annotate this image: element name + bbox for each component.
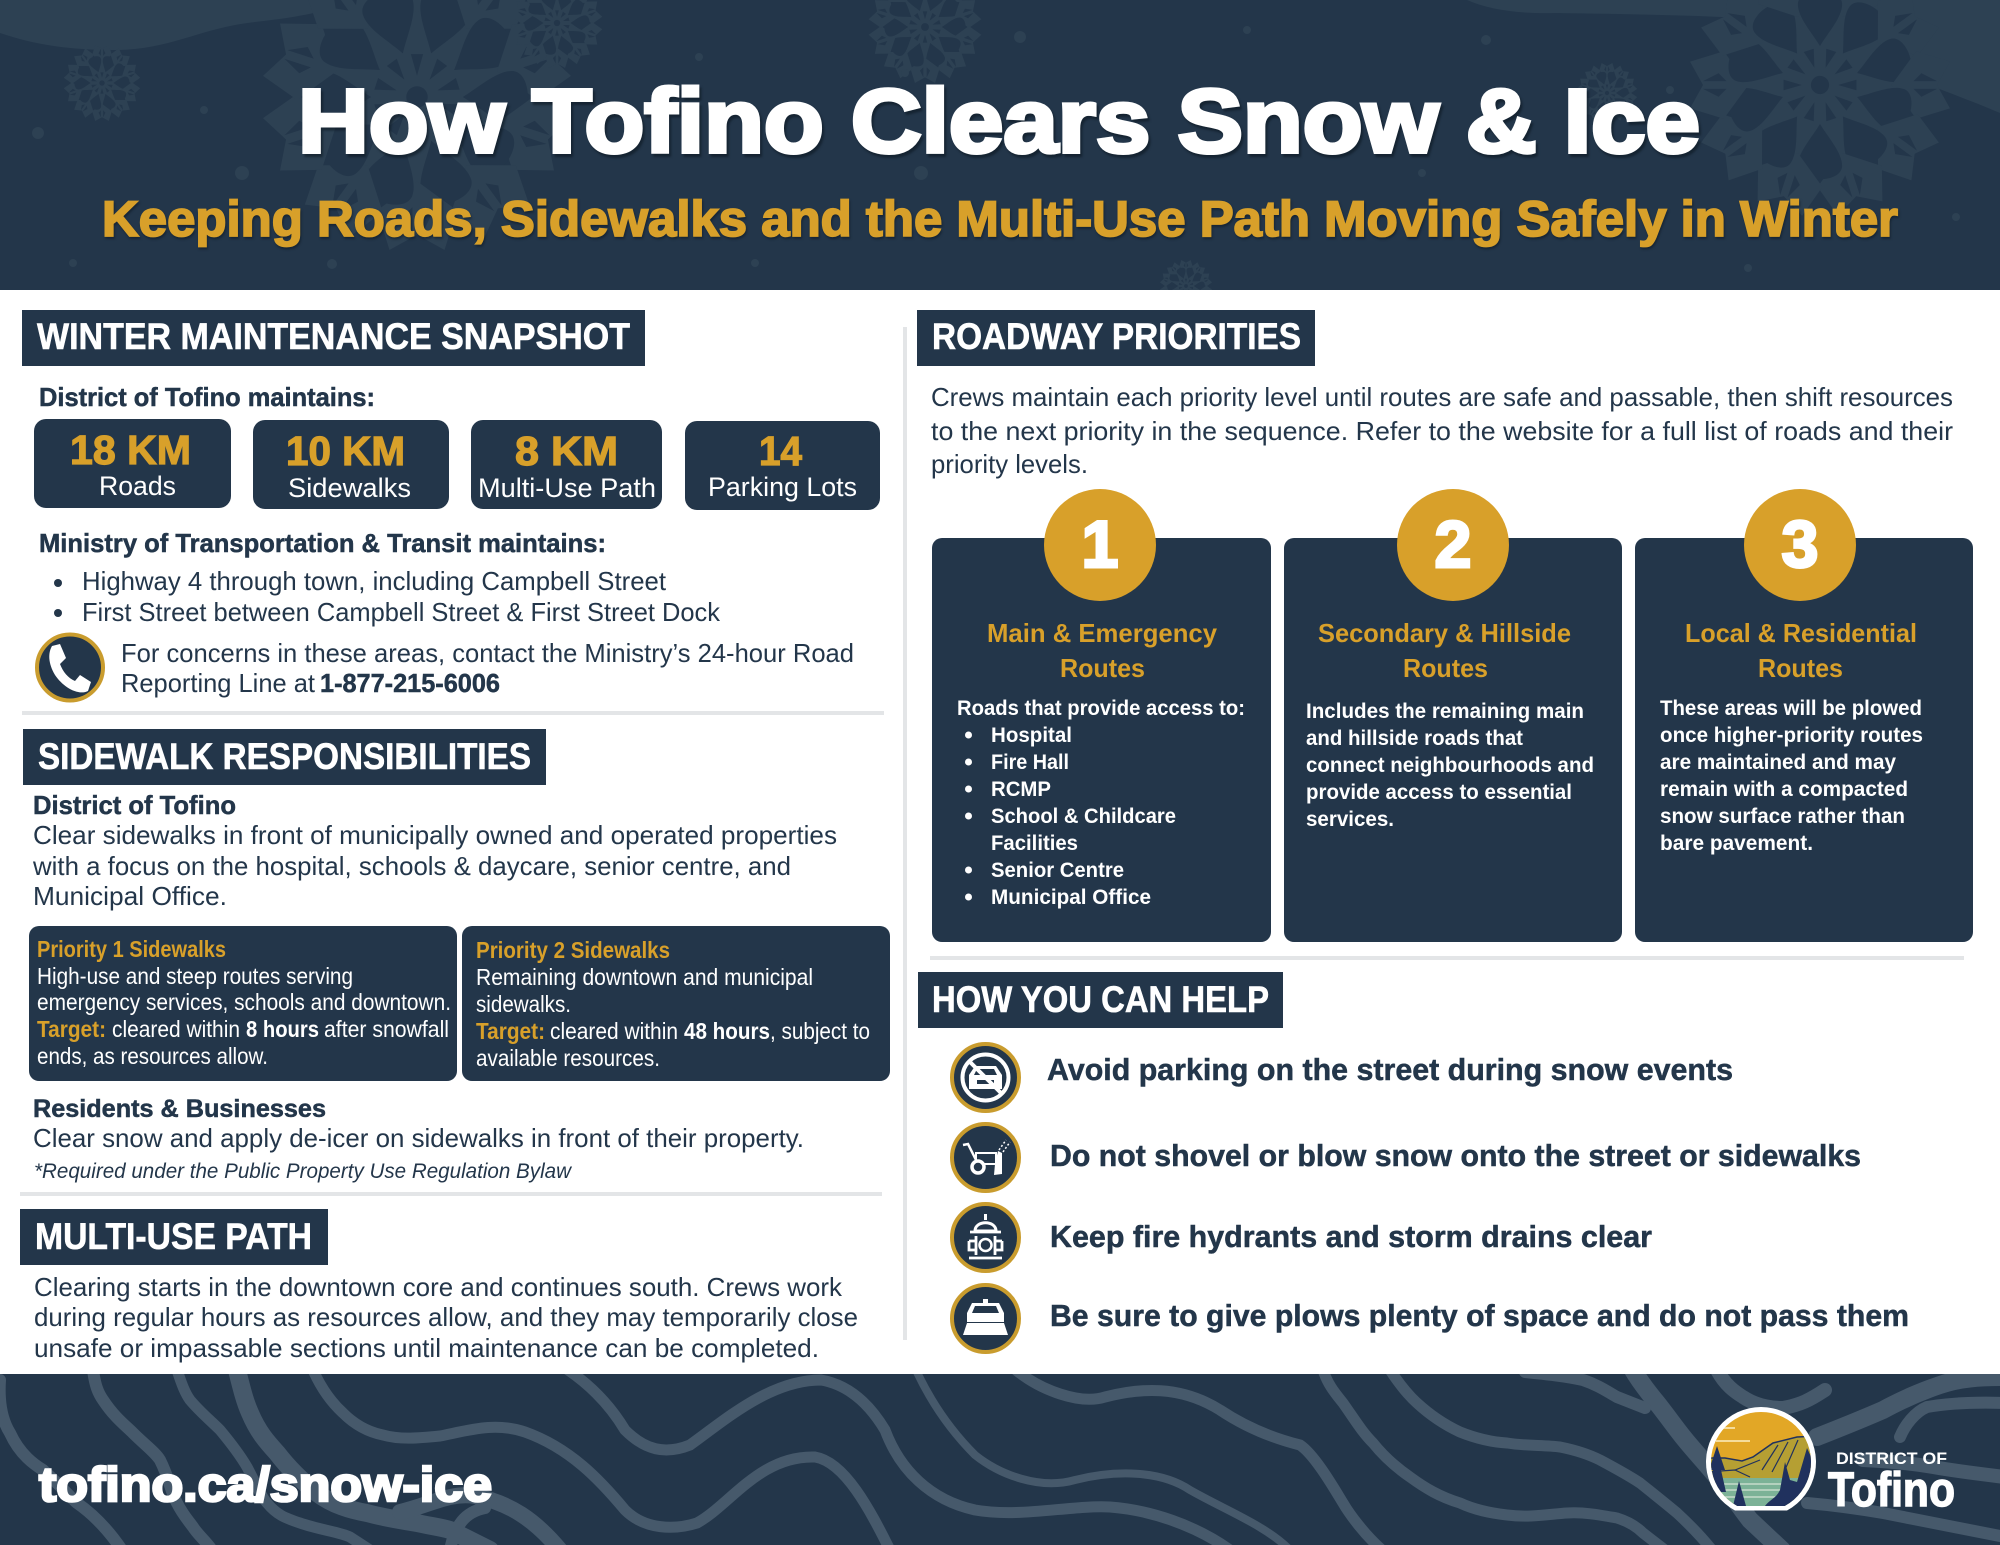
district of tofino text: District of Tofino bbox=[33, 790, 236, 820]
panel: how you can help bbox=[918, 972, 1909, 1352]
heading: winter maintenance snapshot: WINTER MAINTENANCE SNAPSHOT bbox=[37, 316, 630, 357]
stat card: sidewalks bbox=[253, 420, 449, 509]
stat card: parking lots: Parking Lots bbox=[708, 472, 857, 502]
panel: multi-use path bbox=[20, 1209, 858, 1363]
card: priority 2 sidewalks bbox=[462, 926, 890, 1081]
card: priority 2 secondary and hillside routes: Routes bbox=[1403, 653, 1488, 683]
action text: do not shovel: Do not shovel or blow snow onto the street or sidewalks bbox=[1050, 1138, 1861, 1173]
icon: snow plow bbox=[952, 1285, 1019, 1352]
card: priority 1 sidewalks bbox=[29, 926, 457, 1081]
badge: 2 bbox=[1397, 489, 1509, 601]
subtitle: Keeping Roads, Sidewalks and the Multi-Use Path Moving Safely in Winter bbox=[102, 191, 1898, 247]
icon: fire hydrant bbox=[952, 1204, 1019, 1271]
roadway intro text: Crews maintain each priority level until routes are safe and passable, then shift resources bbox=[931, 382, 1953, 412]
card: priority 1 sidewalks: Target: bbox=[37, 1016, 106, 1042]
stat card: multi-use path bbox=[471, 420, 662, 509]
panel: roadway priorities bbox=[917, 310, 1973, 942]
badge: 1 bbox=[1044, 489, 1156, 601]
logo wordmark: Tofino bbox=[1828, 1464, 1955, 1517]
card: priority 3 local and residential routes: Routes bbox=[1758, 653, 1843, 683]
multi-use path text bbox=[34, 1272, 858, 1363]
footer url: tofino.ca/snow-ice bbox=[39, 1459, 492, 1512]
card: priority 1 main and emergency routes: School & Childcare bbox=[991, 805, 1176, 828]
card: priority 1 sidewalks: 8 hours bbox=[246, 1016, 319, 1042]
stat card: parking lots: 14 bbox=[759, 428, 802, 474]
card: priority 1 sidewalks: emergency services, schools and downtown. bbox=[37, 989, 451, 1015]
heading: winter maintenance snapshot bbox=[22, 310, 645, 366]
multi-use path text: unsafe or impassable sections until maintenance can be completed. bbox=[34, 1333, 819, 1363]
stat card: sidewalks: 10 KM bbox=[286, 428, 405, 474]
logo wordmark: DISTRICT OF bbox=[1836, 1449, 1947, 1468]
card: priority 3 local and residential routes: These areas will be plowed bbox=[1660, 697, 1922, 720]
subheading: ministry maintains: Ministry of Transportation & Transit maintains: bbox=[39, 528, 606, 558]
heading: roadway priorities: ROADWAY PRIORITIES bbox=[932, 316, 1301, 357]
card: priority 3 local and residential routes: are maintained and may bbox=[1660, 751, 1896, 774]
district of tofino text: Clear sidewalks in front of municipally owned and operated properties bbox=[33, 820, 837, 850]
panel: footer bbox=[0, 1370, 2000, 1545]
card: priority 3 local and residential routes: Local & Residential bbox=[1685, 618, 1917, 648]
roadway intro text: priority levels. bbox=[931, 449, 1088, 479]
card: priority 3 local and residential routes: once higher-priority routes bbox=[1660, 724, 1923, 747]
card: priority 2 sidewalks: Priority 2 Sidewalks bbox=[476, 937, 670, 963]
stat card: roads bbox=[34, 419, 231, 508]
card: priority 2 secondary and hillside routes bbox=[1284, 489, 1622, 942]
footer wave pattern bbox=[0, 1370, 2000, 1545]
logo: district of tofino bbox=[1705, 1405, 1955, 1517]
district of tofino text: Municipal Office. bbox=[33, 881, 227, 911]
header background waves and snowflakes bbox=[0, 0, 2000, 313]
ministry contact text: For concerns in these areas, contact the Ministry’s 24-hour Road bbox=[121, 638, 854, 668]
residents and businesses text: Residents & Businesses bbox=[33, 1095, 326, 1123]
card: priority 1 main and emergency routes: Routes bbox=[1060, 653, 1145, 683]
card: priority 3 local and residential routes: remain with a compacted bbox=[1660, 778, 1908, 801]
icon: no parking bbox=[952, 1044, 1019, 1111]
card: priority 1 sidewalks: ends, as resources allow. bbox=[37, 1043, 268, 1069]
card: priority 1 sidewalks: Priority 1 Sidewalks bbox=[37, 936, 226, 962]
card: priority 2 sidewalks: 48 hours bbox=[684, 1018, 770, 1044]
panel: winter maintenance snapshot bbox=[22, 310, 880, 700]
stat card: parking lots bbox=[685, 421, 880, 510]
card: priority 1 main and emergency routes bbox=[932, 489, 1271, 942]
card: priority 2 sidewalks: available resources. bbox=[476, 1045, 660, 1071]
heading: sidewalk responsibilities bbox=[23, 729, 546, 785]
residents and businesses text bbox=[33, 1095, 804, 1183]
card: priority 2 secondary and hillside routes: Secondary & Hillside bbox=[1318, 618, 1571, 648]
stat card: multi-use path: 8 KM bbox=[515, 428, 618, 474]
residents and businesses text: *Required under the Public Property Use Regulation Bylaw bbox=[34, 1160, 573, 1183]
card: priority 3 local and residential routes: snow surface rather than bbox=[1660, 805, 1905, 828]
badge: 3 bbox=[1744, 489, 1856, 601]
heading: multi-use path bbox=[20, 1209, 328, 1265]
panel: sidewalk responsibilities bbox=[23, 729, 890, 1183]
stat card: sidewalks: Sidewalks bbox=[288, 473, 411, 503]
heading: multi-use path: MULTI-USE PATH bbox=[35, 1216, 312, 1257]
icon: phone bbox=[37, 634, 103, 700]
residents and businesses text: Clear snow and apply de-icer on sidewalks in front of their property. bbox=[33, 1123, 804, 1153]
heading: how you can help: HOW YOU CAN HELP bbox=[932, 979, 1269, 1020]
roadway intro text: to the next priority in the sequence. Refer to the website for a full list of roads and their bbox=[931, 416, 1953, 446]
stat card: multi-use path: Multi-Use Path bbox=[478, 473, 656, 503]
icon: snow blower bbox=[952, 1124, 1019, 1191]
card: priority 2 secondary and hillside routes: connect neighbourhoods and bbox=[1306, 754, 1594, 777]
roadway intro text bbox=[931, 382, 1953, 479]
title: How Tofino Clears Snow & Ice bbox=[298, 72, 1700, 172]
card: priority 2 secondary and hillside routes: provide access to essential bbox=[1306, 781, 1572, 804]
ministry bullet list bbox=[54, 566, 721, 627]
badge: 3: 3 bbox=[1782, 507, 1818, 581]
heading: sidewalk responsibilities: SIDEWALK RESPONSIBILITIES bbox=[38, 736, 531, 777]
district of tofino text: with a focus on the hospital, schools & daycare, senior centre, and bbox=[32, 851, 791, 881]
stat card: roads: 18 KM bbox=[70, 427, 191, 473]
ministry contact text bbox=[121, 638, 854, 698]
card: priority 1 main and emergency routes: Municipal Office bbox=[991, 886, 1151, 909]
card: priority 2 sidewalks: Target: bbox=[476, 1018, 545, 1044]
card: priority 2 sidewalks: cleared within bbox=[550, 1018, 678, 1044]
card: priority 1 sidewalks: cleared within bbox=[112, 1016, 240, 1042]
stat card: roads: Roads bbox=[99, 471, 176, 501]
subheading: district maintains: District of Tofino maintains: bbox=[39, 382, 375, 412]
multi-use path text: during regular hours as resources allow, and they may temporarily close bbox=[34, 1302, 858, 1332]
action text: keep hydrants clear: Keep fire hydrants and storm drains clear bbox=[1050, 1219, 1652, 1254]
heading: how you can help bbox=[918, 972, 1283, 1028]
badge: 1: 1 bbox=[1082, 507, 1118, 581]
badge: 2: 2 bbox=[1435, 507, 1471, 581]
panel: header banner bbox=[0, 0, 2000, 313]
card: priority 1 main and emergency routes: Fire Hall bbox=[991, 751, 1069, 774]
heading: roadway priorities bbox=[917, 310, 1315, 366]
card: priority 1 main and emergency routes: Hospital bbox=[991, 724, 1072, 747]
card: priority 1 main and emergency routes: Main & Emergency bbox=[987, 618, 1218, 648]
card: priority 1 main and emergency routes: RCMP bbox=[991, 778, 1051, 801]
card: priority 3 local and residential routes bbox=[1635, 489, 1973, 942]
ministry contact text: 1-877-215-6006 bbox=[320, 668, 500, 698]
card: priority 2 secondary and hillside routes: services. bbox=[1306, 808, 1394, 831]
card: priority 2 sidewalks: , subject to bbox=[770, 1018, 870, 1044]
ministry bullet list: First Street between Campbell Street & First Street Dock bbox=[82, 597, 721, 627]
card: priority 1 main and emergency routes: Senior Centre bbox=[991, 859, 1124, 882]
action text: give plows space: Be sure to give plows plenty of space and do not pass them bbox=[1050, 1298, 1909, 1333]
district of tofino text bbox=[32, 790, 837, 911]
ministry bullet list: Highway 4 through town, including Campbell Street bbox=[82, 566, 667, 596]
card: priority 1 main and emergency routes: Roads that provide access to: bbox=[957, 697, 1245, 720]
action text: avoid parking: Avoid parking on the street during snow events bbox=[1047, 1052, 1733, 1087]
card: priority 3 local and residential routes: bare pavement. bbox=[1660, 832, 1813, 855]
card: priority 1 main and emergency routes: Facilities bbox=[991, 832, 1078, 855]
card: priority 1 sidewalks: after snowfall bbox=[324, 1016, 449, 1042]
card: priority 2 secondary and hillside routes: and hillside roads that bbox=[1306, 727, 1523, 750]
ministry contact text: Reporting Line at bbox=[121, 668, 316, 698]
card: priority 2 sidewalks: sidewalks. bbox=[476, 991, 571, 1017]
card: priority 1 sidewalks: High-use and steep routes serving bbox=[37, 963, 353, 989]
card: priority 2 secondary and hillside routes: Includes the remaining main bbox=[1306, 700, 1584, 723]
multi-use path text: Clearing starts in the downtown core and continues south. Crews work bbox=[34, 1272, 843, 1302]
logo emblem bbox=[1705, 1405, 1818, 1515]
card: priority 2 sidewalks: Remaining downtown and municipal bbox=[476, 964, 813, 990]
